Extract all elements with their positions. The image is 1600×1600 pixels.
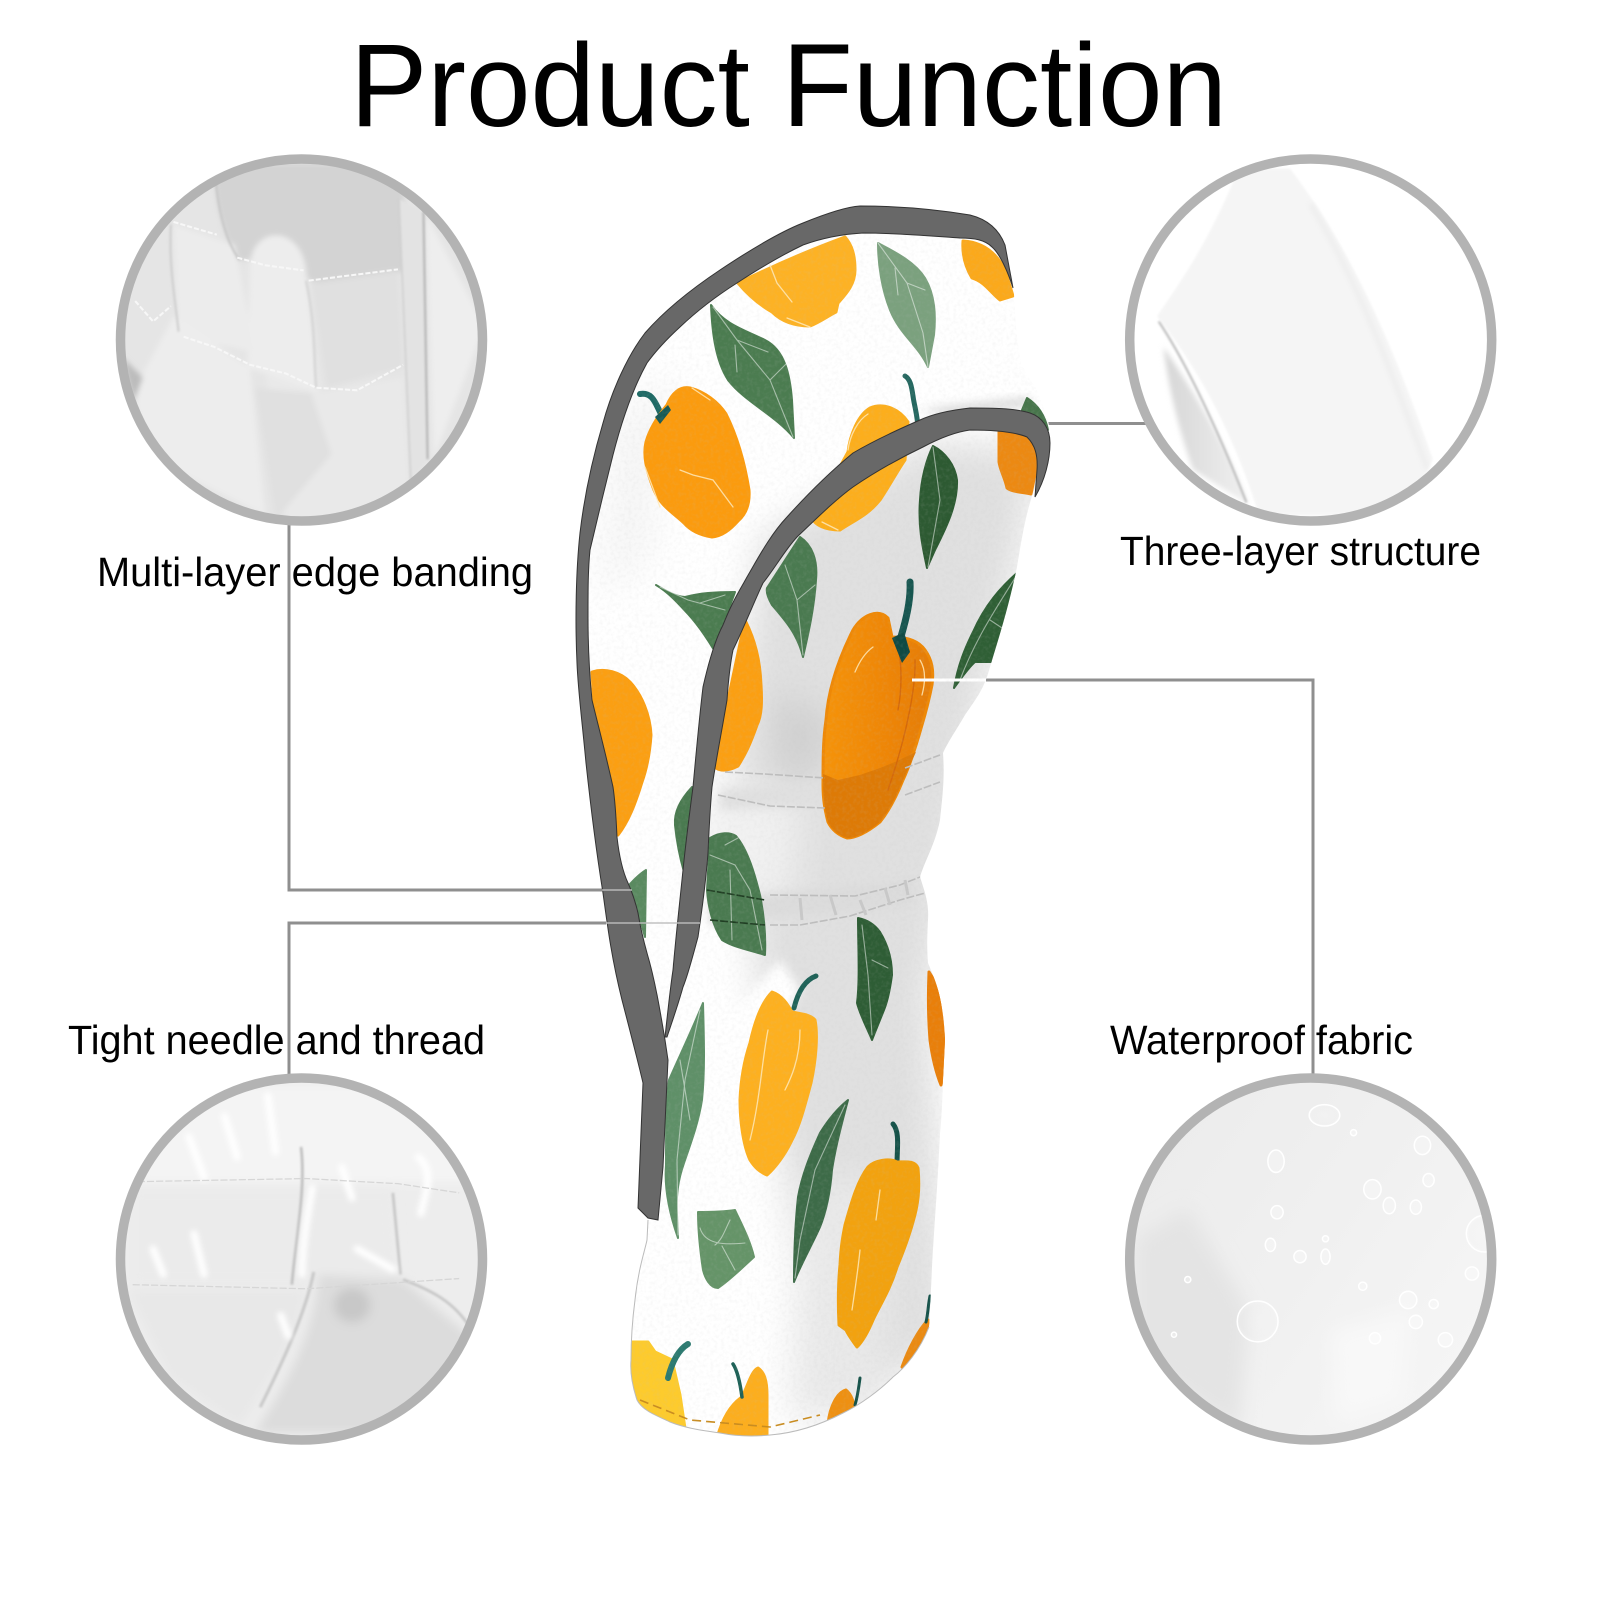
label: tight needle and thread: Tight needle and thread xyxy=(68,1017,485,1063)
title: Product Function xyxy=(350,20,1227,152)
texture: fabric grain xyxy=(591,236,1049,1436)
connector: multi-layer edge banding xyxy=(289,525,602,890)
connector: three-layer structure xyxy=(1047,422,1147,425)
leaf: dark centre top xyxy=(919,446,957,568)
infographic canvas xyxy=(68,40,1496,1445)
connector: waterproof fabric xyxy=(986,680,1313,1074)
label: three-layer structure: Three-layer structure xyxy=(1120,528,1481,574)
pepper: bottom middle xyxy=(717,1364,767,1438)
product: headcover with pepper print xyxy=(560,190,1060,1450)
seams: gathered stitching xyxy=(640,755,940,1427)
pepper: lower right xyxy=(838,1124,919,1347)
pepper: bottom right small xyxy=(828,1378,860,1424)
pepper: right inner xyxy=(999,432,1038,494)
panel: multi-layer edge banding detail xyxy=(112,153,490,531)
pepper: lower yellow xyxy=(740,976,816,1175)
panel: three-layer structure detail xyxy=(1121,153,1499,531)
pepper: big centre orange xyxy=(823,582,933,838)
leaf: lower long dark xyxy=(794,1100,848,1282)
connector: tight needle and thread xyxy=(289,923,606,1074)
icon: water droplets xyxy=(1171,1105,1503,1347)
binding: inner flap band xyxy=(665,408,1050,1037)
leaf: behind flap top right xyxy=(1022,398,1048,430)
label: waterproof fabric: Waterproof fabric xyxy=(1110,1017,1413,1063)
leaf: lower long left xyxy=(666,1003,704,1238)
pepper: left edge orange xyxy=(592,670,651,835)
binding: outer edge band xyxy=(576,206,1013,1220)
leaf: behind flap left xyxy=(675,787,695,872)
pepper: bottom left yellow xyxy=(630,1342,688,1435)
leaf: left panel xyxy=(656,585,735,650)
highlight: connector across pepper xyxy=(912,678,986,682)
fabric body xyxy=(590,236,1049,1436)
pepper: main orange xyxy=(640,388,749,537)
leaf: below flap arc xyxy=(767,537,816,657)
pepper: behind inner flap xyxy=(812,376,918,530)
leaf: centre stitched xyxy=(707,833,765,955)
leaf: by outer band xyxy=(630,870,646,937)
panel: tight needle and thread detail xyxy=(112,1070,490,1448)
pepper: top right yellow xyxy=(963,241,1013,300)
leaf: upper dark green xyxy=(711,305,794,438)
leaf: lower light broad xyxy=(698,1210,754,1288)
panel: waterproof fabric detail xyxy=(1120,1070,1503,1450)
pepper: right edge xyxy=(928,972,946,1085)
leaf: right dark xyxy=(954,572,1018,688)
pepper: top yellow xyxy=(738,237,855,327)
outline: fabric lower edge xyxy=(631,1220,929,1436)
highlight: connector traces over binding xyxy=(602,890,700,923)
pepper: under flap orange xyxy=(716,620,762,770)
leaf: top light green xyxy=(878,243,935,367)
leaf: dark below gather xyxy=(857,918,892,1040)
label: multi-layer edge banding: Multi-layer edge banding xyxy=(97,549,533,595)
pepper: right edge lower xyxy=(902,1296,935,1367)
